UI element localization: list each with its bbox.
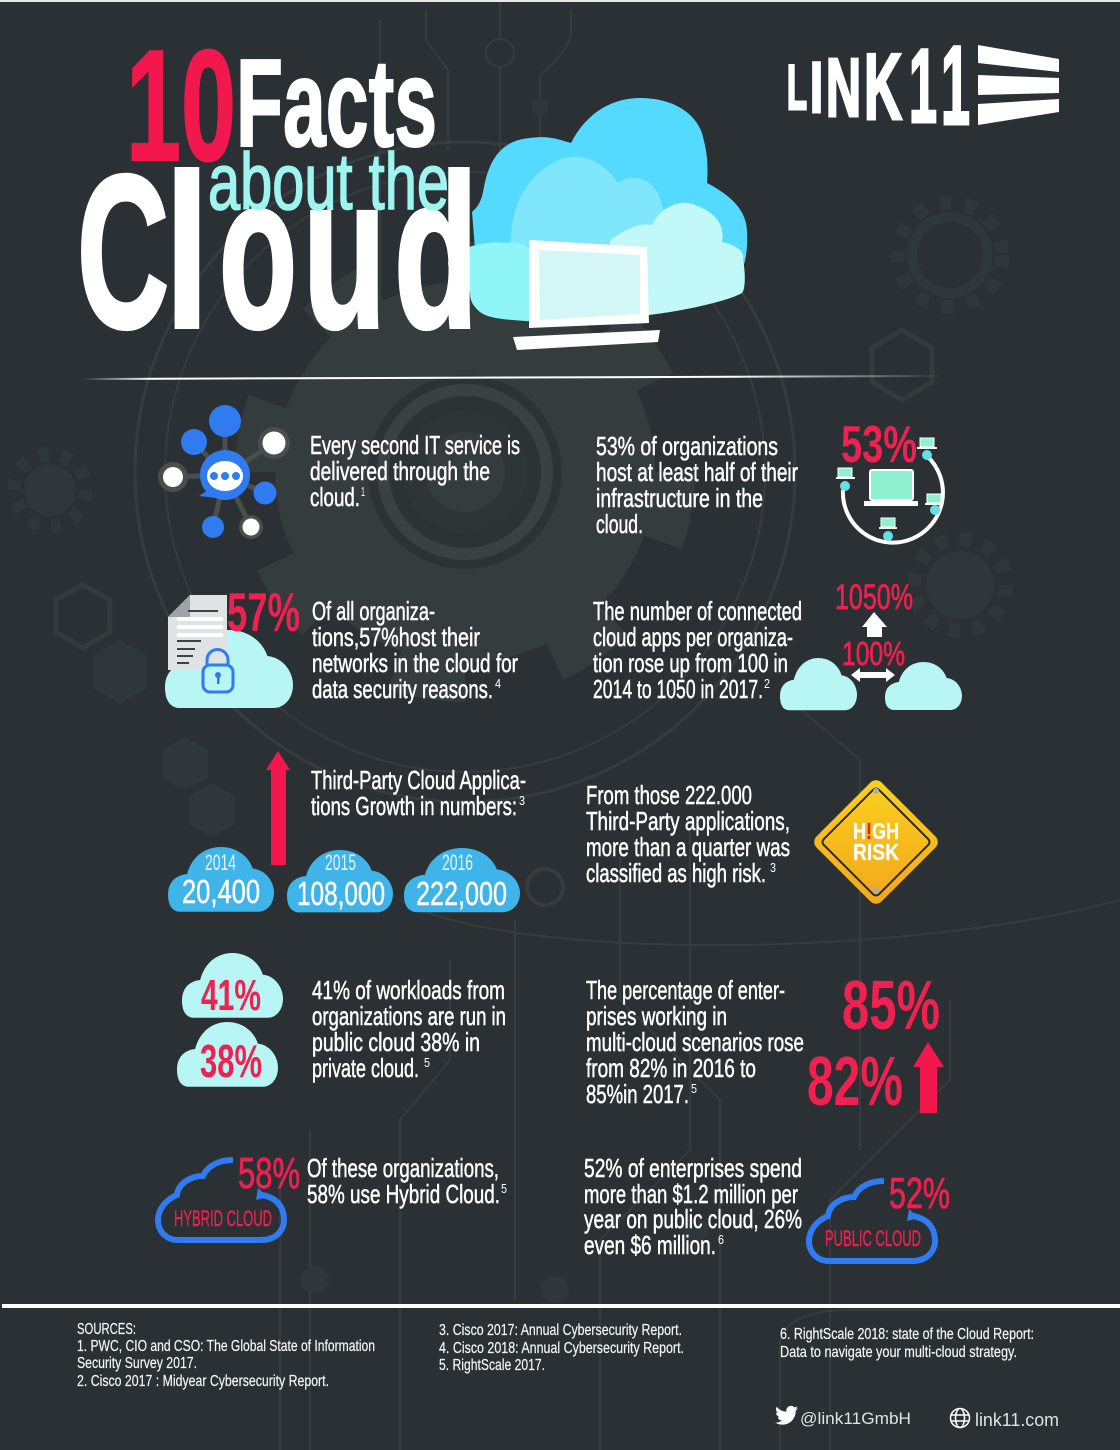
fact 6 text: From those 222.000 [586,780,752,810]
fact 5 text: Third-Party Cloud Applica- [311,765,526,795]
fact 1 text: delivered through the [310,456,490,486]
title: Cloud: o [219,131,297,374]
fact 2 text: infrastructure in the [596,483,763,513]
title: Cloud: d [394,131,478,374]
fact 2 graphic: 53% with laptop ring [836,416,943,543]
fact 5 graphic: growth clouds [168,751,520,912]
fact 8 graphic: 85% and 82% arrow: 85% [842,966,940,1044]
fact 8 text: 5 [691,1081,697,1096]
title: Cloud: C [77,131,169,374]
twitter handle: @link11GmbH [800,1409,911,1428]
fact 2 graphic: 53% with laptop ring: 53% [841,416,917,474]
fact 4 graphic: clouds and growth: 1050% [835,578,913,617]
fact 10 text: year on public cloud, 26% [584,1204,802,1234]
fact 6 text: more than a quarter was [586,832,790,862]
title: 10: 10 [126,18,236,194]
fact 10 text: 6 [718,1232,724,1247]
fact 7 text: organizations are run in [312,1001,506,1031]
fact 5 text [311,765,526,821]
fact 4 text: The number of connected [593,596,802,626]
fact 8 text: 85%in 2017. [586,1079,689,1109]
logo: LINK 11: 1 [941,23,970,148]
cloud 2016: 222,000 [416,875,507,912]
fact 8 text: multi-cloud scenarios rose [586,1027,804,1057]
fact 2 text: cloud. [596,509,643,539]
title: Cloud: l [165,131,209,374]
fact 7 graphic: 41% and 38% clouds: 38% [200,1035,262,1087]
fact 6 text: 3 [770,860,776,875]
fact 1 icon: network [158,405,290,539]
fact 10 text: 52% of enterprises spend [584,1153,802,1183]
cloud 2014: 20,400 [182,873,260,910]
website: link11.com [975,1410,1059,1430]
fact 2 text: host at least half of their [596,457,798,487]
fact 9 text: 58% use Hybrid Cloud. [307,1179,500,1209]
icon: globe [950,1408,970,1428]
fact 3 text: tions,57%host their [312,622,480,652]
fact 10 text: even $6 million. [584,1230,716,1260]
fact 7 text: public cloud 38% in [312,1027,480,1057]
fact 6 text [586,780,790,888]
cloud 2015: 2015 [325,850,356,875]
cloud 2015 [287,850,393,912]
cloud 2014: 2014 [205,850,236,875]
fact 6 text: Third-Party applications, [586,806,790,836]
fact 3 text: 4 [495,676,501,691]
fact 7 graphic: 41% and 38% clouds [177,953,283,1087]
sources: column 3: 6. RightScale 2018: state of the Cloud Report: [780,1326,1034,1343]
icon: laptop [513,240,660,350]
fact 4 text: 2 [764,676,770,691]
sources: column 1: 2. Cisco 2017 : Midyear Cybersecurity Report. [77,1373,329,1390]
fact 7 text: 41% of workloads from [312,975,505,1005]
fact 1 text: cloud. [310,482,360,512]
logo: LINK 11: I [810,49,823,128]
fact 3 text: Of all organiza- [312,596,435,626]
fact 6 icon: high risk sign: H!GH [853,818,899,844]
sources: column 2: 5. RightScale 2017. [439,1357,545,1374]
fact 7 text: private cloud. [312,1053,419,1083]
icon: twitter bird [775,1406,798,1425]
fact 10 graphic: public cloud: 52% [889,1169,950,1218]
fact 7 graphic: 41% and 38% clouds: 41% [201,971,261,1020]
title: Facts: Facts [236,35,437,173]
logo: LINK 11: L [787,53,807,123]
fact 9 graphic: hybrid cloud: HYBRID CLOUD [174,1206,272,1231]
fact 5 text: tions Growth in numbers: [311,791,517,821]
title: about the: about the [208,137,449,226]
cloud 2014 [168,847,274,912]
fact 4 graphic: clouds and growth: 100% [842,635,905,672]
fact 4 text: tion rose up from 100 in [593,648,788,678]
fact 10 graphic: public cloud [809,1169,950,1261]
fact 9 text: Of these organizations, [307,1153,499,1183]
fact 1 text: Every second IT service is [310,430,520,460]
logo: LINK 11: 1 [909,28,937,145]
fact 1 text: 1 [361,484,365,499]
arrow up [266,751,290,865]
fact 2 text: 53% of organizations [596,431,778,461]
fact 3 icon: document, lock and cloud [165,581,300,708]
sources: column 1: Security Survey 2017. [77,1355,197,1372]
sources: column 3: Data to navigate your multi-cloud strategy. [780,1344,1017,1361]
logo: LINK 11: N [826,41,861,134]
57%: 57% [227,581,300,643]
fact 8 text: The percentage of enter- [586,975,785,1005]
fact 9 text: 5 [501,1181,507,1196]
fact 6 icon: high risk sign: RISK [853,839,899,865]
sources: column 3 [780,1326,1034,1361]
fact 10 text [584,1153,802,1260]
fact 8 graphic: 85% and 82% arrow: 82% [807,1042,903,1120]
fact 4 graphic: clouds and growth [780,578,962,710]
fact 1 text [310,430,520,512]
fact 8 text: from 82% in 2016 to [586,1053,756,1083]
fact 4 text [593,596,802,704]
sources: column 2: 4. Cisco 2018: Annual Cybersecurity Report. [439,1340,684,1357]
fact 3 text: networks in the cloud for [312,648,518,678]
logo: LINK 11 [787,23,1059,148]
sources: column 1 [77,1321,375,1390]
fact 7 text: 5 [424,1055,430,1070]
fact 8 text [586,975,804,1109]
fact 6 text: classified as high risk. [586,858,766,888]
fact 7 text [312,975,506,1083]
fact 9 graphic: hybrid cloud: 58% [238,1149,300,1198]
fact 3 text [312,596,518,704]
sources: column 2: 3. Cisco 2017: Annual Cybersecurity Report. [439,1322,682,1339]
fact 9 graphic: hybrid cloud [158,1149,300,1240]
fact 4 text: 2014 to 1050 in 2017. [593,674,763,704]
fact 5 text: 3 [519,793,525,808]
cloud 2015: 108,000 [297,875,385,912]
sources: column 1: SOURCES: [77,1321,136,1338]
fact 8 graphic: 85% and 82% arrow [807,966,944,1120]
fact 10 graphic: public cloud: PUBLIC CLOUD [825,1226,921,1251]
cloud 2016 [404,848,520,912]
fact 4 text: cloud apps per organiza- [593,622,793,652]
fact 6 icon: high risk sign [811,777,941,907]
fact 8 text: prises working in [586,1001,727,1031]
cloud 2016: 2016 [442,850,473,875]
title [77,18,478,374]
sources: column 2 [439,1322,684,1374]
hero illustration: clouds and laptop [448,98,747,350]
fact 10 text: more than $1.2 million per [584,1179,798,1209]
title: Cloud: u [303,131,386,374]
logo: LINK 11: K [864,34,902,139]
sources: column 1: 1. PWC, CIO and CSO: The Global State of Information [77,1338,375,1355]
fact 2 text [596,431,798,539]
fact 9 text [307,1153,507,1209]
fact 3 text: data security reasons. [312,674,493,704]
